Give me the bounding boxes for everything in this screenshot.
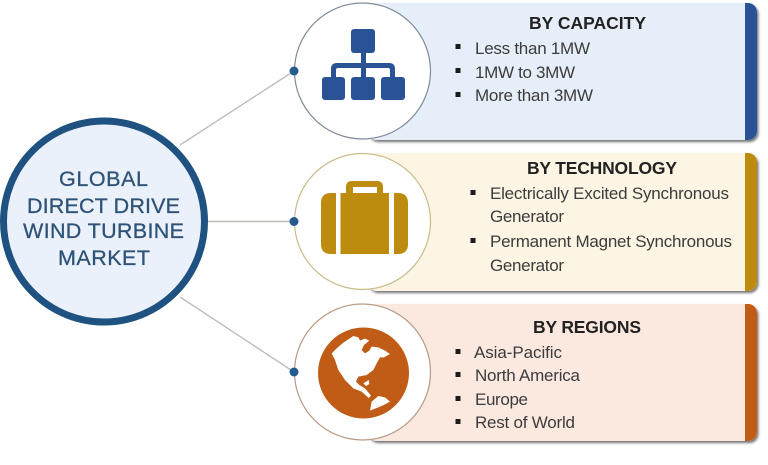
text: by technology: [470, 158, 732, 275]
icon: hierarchy: [322, 29, 405, 100]
text: by capacity: Less than 1MW: [475, 39, 590, 58]
text: by capacity: [456, 13, 646, 105]
title: DIRECT DRIVE: [27, 194, 180, 218]
central circle: [4, 121, 204, 322]
title: MARKET: [58, 246, 150, 270]
text: by regions: BY REGIONS: [533, 317, 641, 337]
icon: globe: [318, 328, 409, 418]
title: WIND TURBINE: [23, 219, 184, 243]
connector lines: [180, 71, 294, 372]
text: by regions: [456, 317, 641, 432]
text: by regions: North America: [475, 366, 581, 385]
text: by technology: Permanent Magnet Synchronous: [490, 232, 732, 251]
text: by capacity: 1MW to 3MW: [475, 63, 575, 82]
title: GLOBAL: [59, 167, 148, 191]
text: by regions: Rest of World: [475, 413, 575, 432]
text: by technology: Electrically Excited Synchronous: [490, 184, 729, 203]
text: by capacity: More than 3MW: [475, 86, 593, 105]
dots: [290, 66, 298, 376]
title: [23, 167, 184, 270]
text: by regions: Europe: [475, 390, 528, 409]
text: by capacity: BY CAPACITY: [529, 13, 646, 33]
icon: briefcase: [321, 181, 408, 254]
panel: by technology: [294, 153, 757, 291]
text: by technology: BY TECHNOLOGY: [527, 158, 677, 178]
panel: by capacity: [294, 3, 757, 140]
panel: by regions: [294, 304, 757, 441]
text: by technology: Generator: [490, 256, 564, 275]
text: by regions: Asia-Pacific: [474, 343, 562, 362]
text: by technology: Generator: [490, 207, 564, 226]
